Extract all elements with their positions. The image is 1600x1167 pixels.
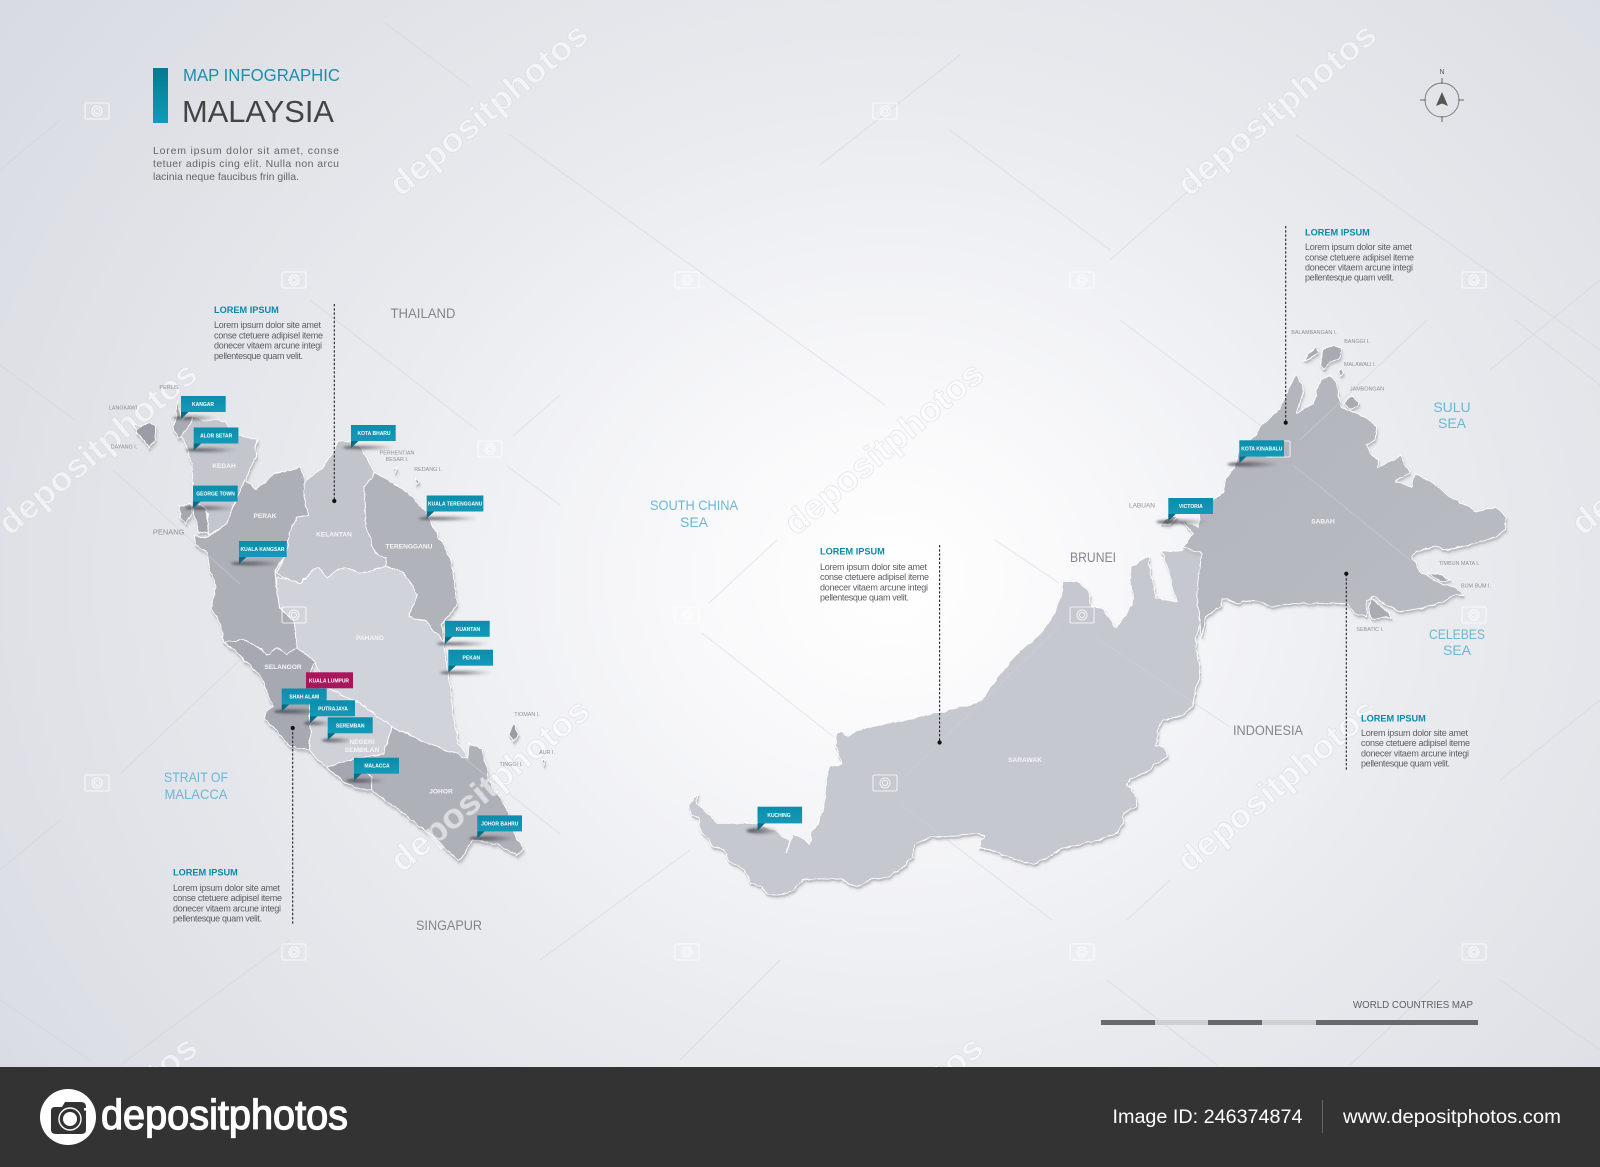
callout: Kelantan note: LOREM IPSUM: [214, 305, 279, 315]
scale bar: [1101, 999, 1478, 1025]
title block: Lorem ipsum dolor sit amet, conse: [153, 145, 339, 157]
scale bar: WORLD COUNTRIES MAP: [1353, 999, 1473, 1011]
tag: Malacca: [346, 758, 399, 783]
callout: Selangor note: [173, 726, 295, 925]
state labels: PAHANG: [356, 635, 384, 642]
state labels: SARAWAK: [1008, 757, 1042, 764]
sea labels: SEA: [680, 514, 709, 530]
tag: Putrajaya: PUTRAJAYA: [318, 706, 348, 712]
sea labels: SOUTH CHINA: [650, 497, 739, 513]
callout: Sarawak note: pellentesque quam velit.: [820, 592, 909, 602]
country labels: SINGAPUR: [416, 918, 482, 933]
callout: Kelantan note: Lorem ipsum dolor site amet: [214, 320, 321, 330]
tag: Seremban: SEREMBAN: [336, 723, 365, 729]
map: Peninsular Malaysia: [133, 401, 545, 861]
state labels: TERENGGANU: [386, 544, 433, 550]
region: Sebatik and eastern islets: [1369, 573, 1449, 618]
island labels: LANGKAWI: [109, 406, 137, 412]
region: Tioman island: [509, 723, 519, 741]
region: Langkawi island: [133, 422, 156, 448]
tag: Seremban: [322, 717, 373, 742]
country labels: THAILAND: [390, 306, 456, 321]
state labels: SABAH: [1311, 518, 1335, 526]
region: Penang island: [179, 505, 192, 524]
footer image id: Image ID: 246374874: [1112, 1106, 1303, 1128]
footer bar: [0, 1067, 1600, 1167]
tag: Kuala Lumpur: KUALA LUMPUR: [309, 678, 349, 684]
region: Perlis: [174, 401, 193, 438]
state labels: PERAK: [253, 513, 277, 520]
region: Johor: [353, 727, 524, 861]
footer website: www.depositphotos.com: [1342, 1106, 1561, 1128]
tag: Johor Bahru: [469, 815, 522, 841]
sea labels: SEA: [1443, 642, 1472, 658]
tag: Kangar: [173, 396, 226, 420]
callout: south Sabah note: [1344, 572, 1470, 770]
state labels: NEGERI: [349, 739, 375, 746]
tag: Victoria: [1156, 498, 1213, 524]
tag: Pekan: [440, 650, 493, 675]
sea labels: MALACCA: [164, 786, 228, 802]
region: Malacca: [327, 758, 372, 790]
watermark pattern: depositphotos: [1170, 691, 1384, 880]
city tags: [173, 396, 1284, 841]
region: Kedah: [181, 417, 257, 535]
tag: Malacca: MALACCA: [364, 764, 390, 770]
region: Perak: [194, 467, 309, 655]
tag: Kuantan: [437, 621, 490, 646]
state labels: SELANGOR: [264, 664, 302, 671]
callout: Sarawak note: [820, 545, 942, 745]
sea labels: SULU: [1433, 399, 1471, 415]
watermark pattern: depositphotos: [1170, 15, 1384, 204]
callout: north Sabah note: donecer vitaem arcune integi: [1305, 262, 1413, 272]
callout: Sarawak note: donecer vitaem arcune integi: [820, 582, 928, 592]
region: northern islands: [1304, 345, 1358, 409]
tag: Kuala Terengganu: KUALA TERENGGANU: [428, 502, 483, 508]
tag: Kuala Lumpur: [306, 672, 353, 688]
title block: tetuer adipis cing elit. Nulla non arcu: [153, 158, 339, 170]
callout: Sarawak note: Lorem ipsum dolor site amet: [820, 562, 927, 572]
island labels: BALAMBANGAN I.: [1291, 330, 1337, 336]
state labels: SEMBILAN: [345, 747, 379, 754]
region: Terengganu: [364, 473, 457, 642]
callout: south Sabah note: LOREM IPSUM: [1361, 714, 1426, 724]
island labels: TIMBUN MATA I.: [1439, 561, 1479, 567]
island labels: DAYANG I.: [111, 444, 137, 450]
tag: Kota Bharu: [343, 425, 396, 450]
title block: lacinia neque faucibus frin gilla.: [153, 171, 299, 183]
island labels: JAMBONGAN: [1350, 386, 1384, 392]
region: Penang mainland: [193, 500, 208, 533]
compass: [1420, 69, 1464, 122]
tag: Kuala Terengganu: [419, 496, 483, 520]
map: Sarawak: [689, 548, 1202, 896]
tag: Victoria: VICTORIA: [1179, 504, 1203, 510]
region: Sabah mainland: [1180, 375, 1506, 637]
callout: Selangor note: donecer vitaem arcune integi: [173, 903, 281, 913]
callout: Sarawak note: LOREM IPSUM: [820, 546, 885, 556]
state labels: KEDAH: [212, 463, 236, 470]
region: small east coast islands: [394, 467, 545, 765]
island labels: BUM BUM I.: [1461, 584, 1491, 590]
tag: Shah Alam: SHAH ALAM: [289, 694, 319, 700]
island labels: PENANG: [153, 528, 185, 536]
island labels: LABUAN: [1129, 502, 1155, 510]
country labels: [390, 306, 1303, 933]
sea labels: SEA: [1438, 415, 1467, 431]
tag: Kota Kinabalu: [1227, 440, 1284, 467]
callout: south Sabah note: Lorem ipsum dolor site amet: [1361, 728, 1468, 738]
callout: Selangor note: LOREM IPSUM: [173, 868, 238, 878]
tag: Kota Kinabalu: KOTA KINABALU: [1241, 446, 1283, 452]
region: Labuan: [1161, 515, 1178, 524]
tag: Putrajaya: [304, 700, 355, 726]
callout: Sarawak note: conse ctetuere adipisel iteme: [820, 572, 929, 582]
tag: Kuching: [746, 807, 802, 834]
state labels: JOHOR: [429, 788, 453, 796]
country labels: INDONESIA: [1233, 723, 1303, 738]
tag: Alor Setar: ALOR SETAR: [200, 434, 233, 440]
region: Pahang: [277, 565, 468, 758]
title block: MALAYSIA: [182, 94, 334, 129]
callout: Kelantan note: [214, 304, 336, 503]
region: Negeri Sembilan: [310, 688, 392, 767]
callout: south Sabah note: conse ctetuere adipisel iteme: [1361, 738, 1470, 748]
island labels: REDANG I.: [414, 467, 442, 473]
compass: N: [1439, 69, 1445, 76]
island labels: [109, 330, 1491, 768]
title block: MAP INFOGRAPHIC: [183, 65, 340, 85]
island labels: MALAWALI I.: [1344, 362, 1376, 368]
callout: Selangor note: Lorem ipsum dolor site amet: [173, 883, 280, 893]
country labels: BRUNEI: [1070, 550, 1116, 565]
tag: Kuching: KUCHING: [767, 813, 791, 819]
footer logo: [40, 1089, 348, 1145]
tag: George Town: GEORGE TOWN: [196, 492, 235, 498]
state labels: KELANTAN: [316, 532, 352, 538]
callout: Kelantan note: pellentesque quam velit.: [214, 351, 303, 361]
map: Sabah: [1161, 345, 1506, 637]
watermark pattern: depositphotos: [382, 15, 596, 204]
sea labels: CELEBES: [1429, 626, 1485, 642]
island labels: TIOMAN I.: [514, 712, 540, 718]
tag: Kangar: KANGAR: [192, 402, 214, 408]
footer logo: depositphotos: [101, 1091, 348, 1138]
tag: Pekan: PEKAN: [463, 656, 480, 662]
tag: Kuantan: KUANTAN: [456, 627, 481, 633]
island labels: SEBATIC I.: [1356, 627, 1384, 633]
callout: north Sabah note: pellentesque quam velit.: [1305, 273, 1394, 283]
island labels: BESAR I.: [386, 457, 408, 463]
island labels: TINGGI I.: [499, 762, 523, 768]
callout: north Sabah note: conse ctetuere adipisel iteme: [1305, 252, 1414, 262]
callout: north Sabah note: LOREM IPSUM: [1305, 228, 1370, 238]
callout: Selangor note: pellentesque quam velit.: [173, 914, 262, 924]
callout: Kelantan note: donecer vitaem arcune integi: [214, 341, 322, 351]
callout: south Sabah note: pellentesque quam velit.: [1361, 759, 1450, 769]
tag: Johor Bahru: JOHOR BAHRU: [481, 821, 519, 827]
tag: George Town: [185, 486, 238, 510]
callout: Kelantan note: conse ctetuere adipisel iteme: [214, 330, 323, 340]
callout: south Sabah note: donecer vitaem arcune integi: [1361, 748, 1469, 758]
callout: Selangor note: conse ctetuere adipisel iteme: [173, 893, 282, 903]
tag: Kuala Kangsar: [231, 541, 287, 566]
callout: north Sabah note: [1284, 226, 1414, 425]
footer divider: [1322, 1100, 1324, 1133]
sea labels: [164, 399, 1485, 802]
region: Selangor: [223, 640, 327, 751]
region: Kelantan: [276, 441, 387, 583]
sea labels: STRAIT OF: [164, 769, 228, 785]
watermark pattern: depositphotos: [383, 691, 597, 880]
island labels: AUR I.: [539, 750, 555, 756]
callout: north Sabah note: Lorem ipsum dolor site amet: [1305, 242, 1412, 252]
island labels: PERHENTIAN: [380, 450, 414, 456]
tag: Kota Bharu: KOTA BHARU: [357, 431, 391, 437]
watermark pattern: depositphotos: [777, 354, 991, 543]
tag: Shah Alam: [274, 688, 327, 714]
tag: Kuala Kangsar: KUALA KANGSAR: [241, 547, 285, 553]
island labels: BANGGI I.: [1344, 339, 1370, 345]
title block: [153, 65, 340, 183]
island labels: PERLIS: [159, 385, 179, 391]
tag: Alor Setar: [186, 428, 238, 452]
state labels: [212, 463, 1335, 796]
